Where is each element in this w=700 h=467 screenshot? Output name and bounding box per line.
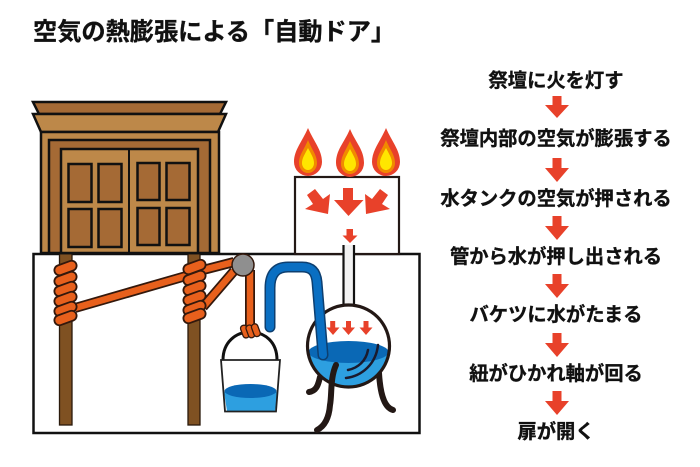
shrine lower roof — [33, 114, 226, 132]
step 1: 祭壇に火を灯す — [489, 70, 623, 92]
vessel water — [309, 341, 388, 386]
shrine body — [41, 132, 219, 253]
flow arrows — [545, 96, 569, 415]
bucket water — [224, 392, 278, 411]
arrow: heat down centre — [334, 188, 364, 216]
shrine posts — [60, 253, 72, 425]
shrine upper roof — [33, 102, 226, 114]
rope knot — [240, 323, 261, 339]
step 6: 紐がひかれ軸が回る — [469, 362, 643, 385]
vessel shell — [308, 305, 390, 387]
arrow 3 — [545, 216, 569, 240]
arrow: heat diagonal right — [365, 189, 390, 214]
icon: bucket — [221, 323, 280, 412]
rope coil left post — [53, 259, 78, 327]
arrow 6 — [545, 391, 569, 415]
shrine inner frame — [49, 140, 210, 253]
bucket handle — [223, 332, 277, 360]
rope segments — [75, 262, 250, 330]
white air pipe — [344, 245, 354, 317]
vessel interior — [308, 305, 390, 387]
arrow 4 — [545, 274, 569, 298]
vessel legs — [309, 373, 393, 410]
arrow: small down — [342, 229, 358, 243]
title: 空気の熱膨張による「自動ドア」 — [33, 19, 395, 46]
vessel swirl lines — [346, 345, 378, 378]
icon: flame right — [372, 128, 400, 176]
step 7: 扉が開く — [517, 420, 595, 443]
panel: altar box with fire — [294, 128, 400, 254]
icon: flame middle — [336, 129, 364, 177]
step 2: 祭壇内部の空気が膨張する — [440, 127, 672, 150]
red pressure arrows — [326, 321, 372, 335]
rope and pulley — [53, 254, 254, 330]
shrine doors — [61, 149, 198, 253]
arrow 1 — [545, 96, 569, 118]
icon: water vessel — [305, 305, 393, 430]
step 5: バケツに水がたまる — [470, 303, 642, 326]
icon: shrine — [33, 102, 226, 425]
step 4: 管から水が押し出される — [450, 245, 662, 268]
bucket body — [221, 360, 280, 412]
front leg — [317, 365, 336, 430]
rope coil right post — [182, 258, 207, 325]
arrow: heat diagonal left — [305, 189, 330, 214]
step 3: 水タンクの空気が押される — [440, 187, 672, 210]
arrow 5 — [545, 333, 569, 357]
icon: pulley — [232, 254, 254, 276]
arrow 2 — [545, 158, 569, 182]
icon: flame left — [294, 128, 322, 176]
steps flow text — [440, 70, 672, 443]
panel: underground chamber — [34, 254, 420, 433]
blue water pipe — [270, 267, 323, 355]
